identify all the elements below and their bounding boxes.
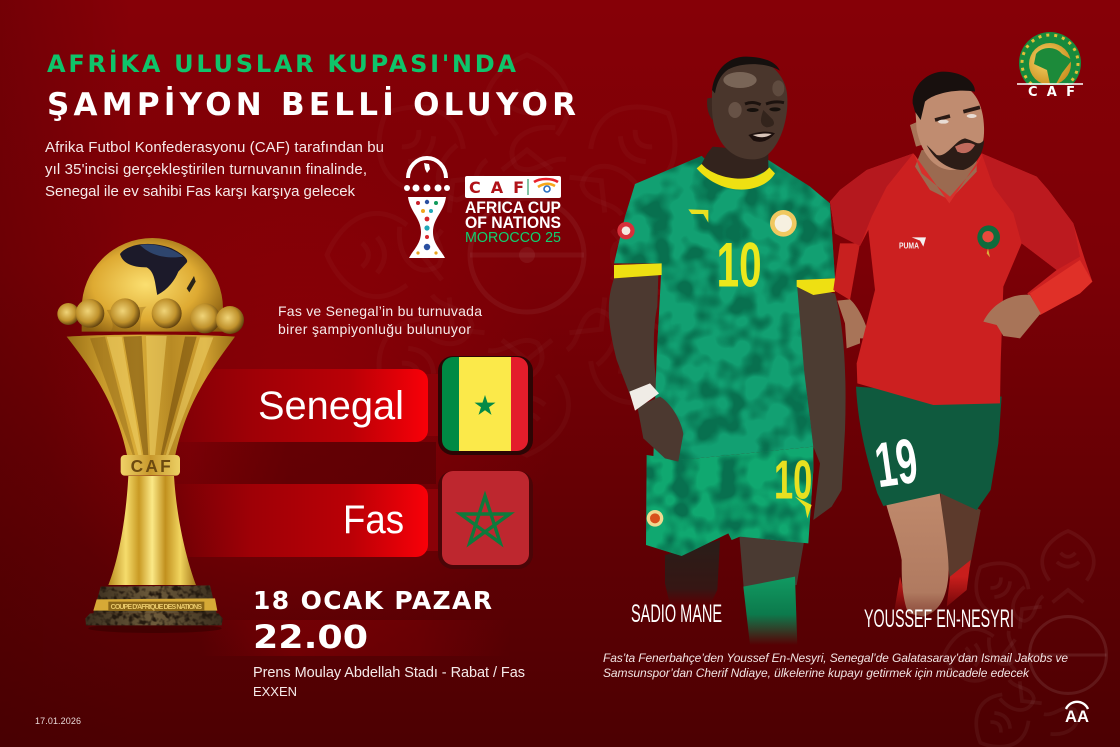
logo: CAF TotalEnergies AFCON Morocco 25: MOROCCO 25	[465, 229, 561, 246]
venue and broadcaster	[253, 665, 525, 699]
intro paragraph: yıl 35'incisi gerçekleştirilen turnuvanın finalinde,	[45, 161, 367, 178]
label: Fas: Fas	[343, 498, 404, 542]
intro paragraph: Afrika Futbol Konfederasyonu (CAF) tarafından bu	[45, 139, 384, 156]
crest	[617, 210, 797, 239]
puma logo	[688, 209, 708, 223]
player: Youssef En-Nesyri	[830, 72, 1092, 617]
logo: CAF	[1017, 32, 1083, 100]
logo: CAF TotalEnergies AFCON Morocco 25: AFRICA CUP	[465, 198, 561, 217]
right arm and hand	[797, 287, 846, 520]
trophy collar: CAF	[131, 456, 171, 476]
jersey number: 10	[717, 231, 762, 301]
logo: CAF: CAF	[1028, 85, 1075, 100]
shorts: 19	[871, 426, 922, 501]
flag: Senegal	[438, 356, 533, 455]
sleeve cuffs	[614, 263, 835, 295]
footnote: Samsunspor’dan Cherif Ndiaye, ülkelerine kupayı getirmek için mücadele edecek	[603, 666, 1030, 680]
trophy base: COUPE D'AFRIQUE DES NATIONS	[111, 604, 202, 611]
label: Senegal: Senegal	[258, 384, 404, 428]
shorts	[856, 387, 1002, 510]
left arm	[609, 275, 658, 395]
legs and socks	[886, 490, 981, 617]
title: green line: AFRİKA ULUSLAR KUPASI'NDA	[47, 49, 516, 78]
neck	[915, 150, 977, 200]
venue and broadcaster: EXXEN	[253, 684, 297, 699]
front hand	[983, 295, 1041, 338]
date stamp: 17.01.2026	[35, 716, 81, 726]
match date and time	[253, 586, 492, 656]
trophy collar	[121, 455, 180, 476]
footnote	[603, 651, 1068, 680]
trophy bell	[67, 335, 235, 457]
caption: one championship each: Fas ve Senegal’in bu turnuvada	[278, 303, 482, 319]
logo: Anadolu Agency: AA	[1065, 707, 1089, 726]
shorts	[646, 447, 813, 556]
player: Sadio Mane	[609, 57, 846, 645]
caption: one championship each: birer şampiyonluğu bulunuyor	[278, 321, 471, 337]
left hand and wristband	[629, 383, 683, 462]
player name: Sadio Mane: SADIO MANE	[631, 600, 722, 628]
title: white line: ŞAMPİYON BELLİ OLUYOR	[47, 87, 576, 123]
shorts: 10	[774, 448, 812, 510]
trophy base	[85, 585, 223, 625]
footnote: Fas’ta Fenerbahçe’den Youssef En-Nesyri, Senegal’de Galatasaray’dan Ismail Jakobs ve	[603, 651, 1068, 665]
trophy balls	[57, 298, 244, 334]
crest	[977, 225, 1000, 257]
intro paragraph: Senegal ile ev sahibi Fas karşı karşıya gelecek	[45, 183, 356, 200]
jersey	[614, 147, 835, 460]
match date and time: 18 OCAK PAZAR	[253, 586, 492, 615]
trophy stem	[108, 476, 196, 585]
head	[910, 72, 984, 170]
caption: one championship each	[278, 303, 482, 337]
match date and time: 22.00	[253, 618, 368, 656]
row: Fas	[165, 471, 533, 569]
row: Senegal	[165, 356, 533, 455]
bar: Fas	[165, 484, 428, 557]
flag: Morocco	[438, 471, 533, 569]
logo: CAF TotalEnergies AFCON Morocco 25: OF NATIONS	[465, 213, 561, 232]
bar: Senegal	[165, 369, 428, 442]
back arm and hand	[833, 243, 869, 348]
venue and broadcaster: Prens Moulay Abdellah Stadı - Rabat / Fas	[253, 665, 525, 681]
neck	[700, 147, 768, 187]
jersey	[830, 150, 1092, 405]
intro paragraph	[45, 139, 384, 200]
brand mark: PUMA	[899, 240, 920, 250]
head	[707, 57, 787, 159]
collar	[697, 164, 775, 190]
trophy	[57, 238, 244, 633]
logo: CAF TotalEnergies AFCON Morocco 25: CAF	[469, 178, 524, 197]
player name: Youssef En-Nesyri: YOUSSEF EN-NESYRI	[864, 605, 1014, 633]
logo: Africa Cup of Nations trophy	[404, 158, 450, 258]
trophy globe	[82, 238, 224, 332]
legs and sock	[665, 535, 804, 645]
logo: CAF TotalEnergies AFCON Morocco 25	[465, 176, 561, 246]
